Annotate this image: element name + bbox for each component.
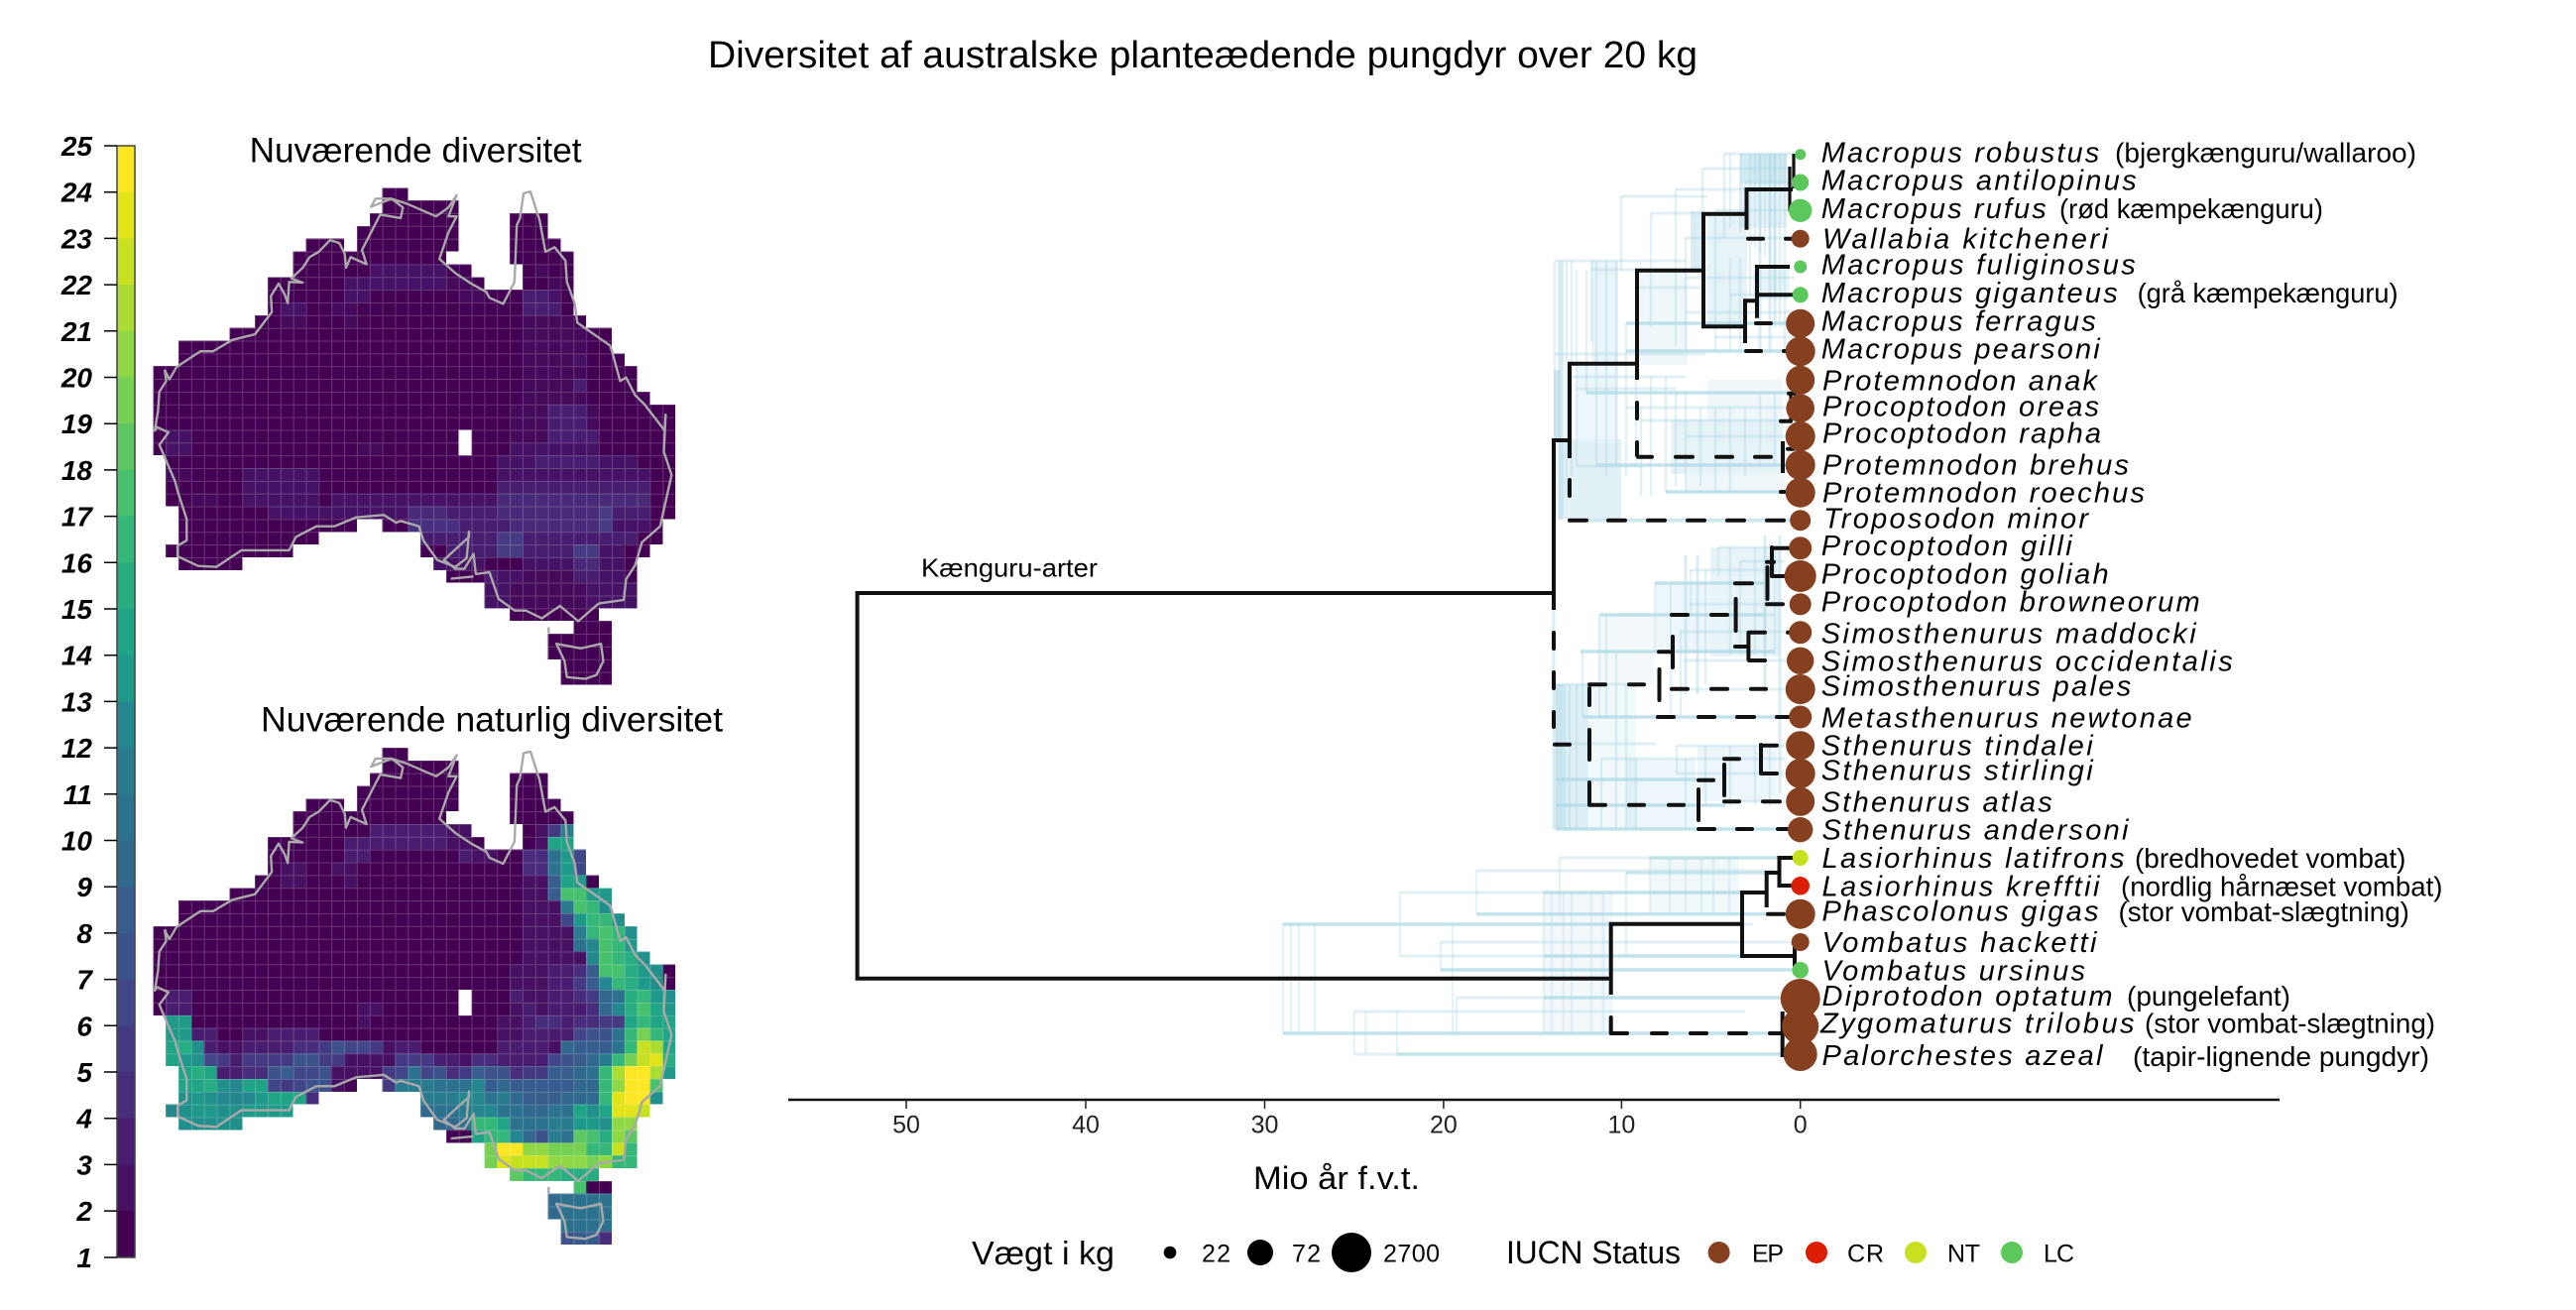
legend: IUCN status: IUCN Status: [1506, 1235, 1681, 1270]
legend: body weight: 72: [1292, 1241, 1321, 1268]
colour scale legend: 20: [60, 363, 92, 393]
colour scale legend: 7: [76, 965, 93, 996]
time axis: 20: [1430, 1112, 1458, 1139]
tip: Lasiorhinus krefftii: Lasiorhinus krefftii: [1822, 871, 2101, 902]
colour scale legend: 1: [76, 1243, 92, 1273]
colour scale legend: 24: [60, 178, 92, 208]
map: current diversity: [153, 187, 675, 684]
tip: Simosthenurus pales: Simosthenurus pales: [1821, 671, 2131, 703]
tip: Macropus pearsoni: Macropus pearsoni: [1821, 334, 2101, 366]
tip: Phascolonus gigas: (stor vombat-slægtning): [2118, 896, 2409, 927]
tip: Macropus robustus: Macropus robustus: [1821, 137, 2099, 169]
legend: IUCN status: EP: [1752, 1241, 1784, 1268]
tip: Lasiorhinus latifrons: (bredhovedet vombat): [2135, 843, 2405, 874]
map: natural diversity: [153, 748, 675, 1245]
legend: body weight: Vægt i kg: [972, 1235, 1114, 1271]
colour scale legend: 14: [61, 641, 92, 671]
colour scale legend: 15: [61, 594, 92, 625]
colour scale legend: 19: [61, 409, 92, 439]
tip: Macropus ferragus: Macropus ferragus: [1821, 305, 2096, 337]
tip: Macropus rufus: (rød kæmpekænguru): [2059, 193, 2323, 224]
colour scale legend: 18: [61, 455, 92, 486]
tip: Protemnodon anak: Protemnodon anak: [1822, 365, 2098, 397]
tip: Sthenurus andersoni: Sthenurus andersoni: [1822, 815, 2130, 847]
tip: Lasiorhinus krefftii: (nordlig hårnæset vombat): [2121, 871, 2443, 901]
tip: Macropus rufus: [1789, 193, 2323, 225]
tip: Sthenurus tindalei: Sthenurus tindalei: [1821, 731, 2094, 763]
tip: Macropus giganteus: (grå kæmpekænguru): [2138, 278, 2399, 308]
tip: Phascolonus gigas: Phascolonus gigas: [1822, 895, 2098, 927]
tip: Palorchestes azeal: (tapir-lignende pungdyr): [2133, 1041, 2429, 1072]
time axis: 0: [1794, 1112, 1808, 1139]
colour scale legend: 25: [60, 131, 92, 162]
legend: body weight: 22: [1202, 1241, 1230, 1268]
tip: Lasiorhinus krefftii: [1791, 871, 2443, 902]
time axis: 30: [1251, 1112, 1278, 1139]
colour scale legend: 10: [61, 825, 92, 857]
title: Diversitet af australske planteædende pungdyr over 20 kg: [708, 35, 1698, 76]
tip: Procoptodon oreas: Procoptodon oreas: [1822, 391, 2099, 422]
legend: IUCN status: NT: [1947, 1241, 1980, 1268]
phylogeny: uncertainty tree cloud in light blue: [1283, 154, 1795, 1054]
tip: Procoptodon browneorum: Procoptodon browneorum: [1821, 587, 2200, 619]
legend: IUCN status: [1506, 1235, 2074, 1270]
time axis: [788, 1100, 2280, 1139]
tip: Palorchestes azeal: [1784, 1037, 2429, 1072]
tip: Simosthenurus occidentalis: Simosthenurus occidentalis: [1821, 647, 2233, 678]
tip: Troposodon minor: Troposodon minor: [1823, 504, 2089, 536]
tip: Phascolonus gigas: [1786, 895, 2409, 929]
tip: Diprotodon optatum: Diprotodon optatum: [1822, 981, 2112, 1012]
time axis: 50: [892, 1112, 920, 1139]
colour scale legend: 5: [76, 1057, 92, 1088]
tip: Macropus giganteus: [1793, 278, 2399, 309]
tip: Wallabia kitcheneri: Wallabia kitcheneri: [1822, 224, 2110, 256]
colour scale legend: 12: [61, 733, 92, 764]
time axis: 10: [1607, 1112, 1635, 1139]
heading: natural diversity map: Nuværende naturlig diversitet: [261, 700, 723, 739]
colour scale legend: 16: [61, 547, 92, 578]
tip: Procoptodon goliah: Procoptodon goliah: [1821, 558, 2109, 590]
axis title: Mio år f.v.t.: [1253, 1160, 1420, 1196]
colour scale legend: 8: [76, 918, 92, 949]
legend: IUCN status: LC: [2044, 1241, 2074, 1268]
colour scale legend: 17: [61, 502, 93, 533]
tip: Zygomaturus trilobus: Zygomaturus trilobus: [1819, 1009, 2134, 1040]
tip: Diprotodon optatum: [1781, 979, 2290, 1018]
tip: Macropus giganteus: Macropus giganteus: [1821, 278, 2118, 309]
colour scale legend: 3: [76, 1149, 92, 1180]
legend: body weight: 2700: [1383, 1241, 1440, 1268]
tip: Procoptodon gilli: Procoptodon gilli: [1821, 531, 2073, 562]
legend: body weight: [972, 1233, 1440, 1272]
colour scale legend: 21: [60, 316, 92, 347]
tip: Macropus robustus: [1795, 137, 2416, 169]
tip: Protemnodon roechus: Protemnodon roechus: [1822, 478, 2145, 510]
annotation: kangaroo species: Kænguru-arter: [921, 553, 1098, 583]
tip: Procoptodon rapha: Procoptodon rapha: [1822, 418, 2101, 450]
colour scale legend: [60, 131, 135, 1273]
colour scale legend: 2: [75, 1196, 92, 1227]
heading: current diversity map: Nuværende diversitet: [250, 132, 582, 171]
phylogeny: consensus tree in black with dashed uncertain branches: [856, 154, 1795, 1057]
colour scale legend: 22: [60, 270, 92, 300]
tip: Sthenurus stirlingi: Sthenurus stirlingi: [1821, 756, 2094, 787]
tip: Diprotodon optatum: (pungelefant): [2127, 981, 2290, 1012]
legend: IUCN status: CR: [1847, 1241, 1884, 1268]
tip: Metasthenurus newtonae: Metasthenurus newtonae: [1821, 702, 2192, 734]
colour scale legend: 13: [61, 686, 92, 717]
tip: Lasiorhinus latifrons: Lasiorhinus latifrons: [1822, 843, 2124, 875]
tip: Macropus robustus: (bjergkænguru/wallaroo): [2115, 137, 2416, 168]
tip: Lasiorhinus latifrons: [1793, 843, 2405, 875]
colour scale legend: 23: [60, 223, 92, 254]
tip: Zygomaturus trilobus: [1782, 1008, 2435, 1045]
tip: Protemnodon brehus: Protemnodon brehus: [1822, 449, 2129, 481]
tip: Vombatus ursinus: Vombatus ursinus: [1822, 955, 2085, 987]
tip: Macropus rufus: Macropus rufus: [1821, 193, 2047, 225]
tip: Simosthenurus maddocki: Simosthenurus maddocki: [1821, 618, 2197, 650]
tip: Vombatus hacketti: Vombatus hacketti: [1822, 927, 2098, 959]
colour scale legend: 9: [76, 872, 92, 902]
tip: Macropus antilopinus: Macropus antilopinus: [1821, 166, 2137, 197]
tip: Sthenurus atlas: Sthenurus atlas: [1821, 786, 2052, 818]
colour scale legend: 6: [76, 1011, 92, 1041]
tip: Zygomaturus trilobus: (stor vombat-slægtning): [2145, 1009, 2435, 1039]
colour scale legend: 4: [75, 1104, 92, 1134]
tip: Palorchestes azeal: Palorchestes azeal: [1822, 1040, 2104, 1072]
time axis: 40: [1072, 1112, 1100, 1139]
tip: Macropus fuliginosus: Macropus fuliginosus: [1821, 250, 2136, 282]
colour scale legend: 11: [63, 779, 92, 810]
